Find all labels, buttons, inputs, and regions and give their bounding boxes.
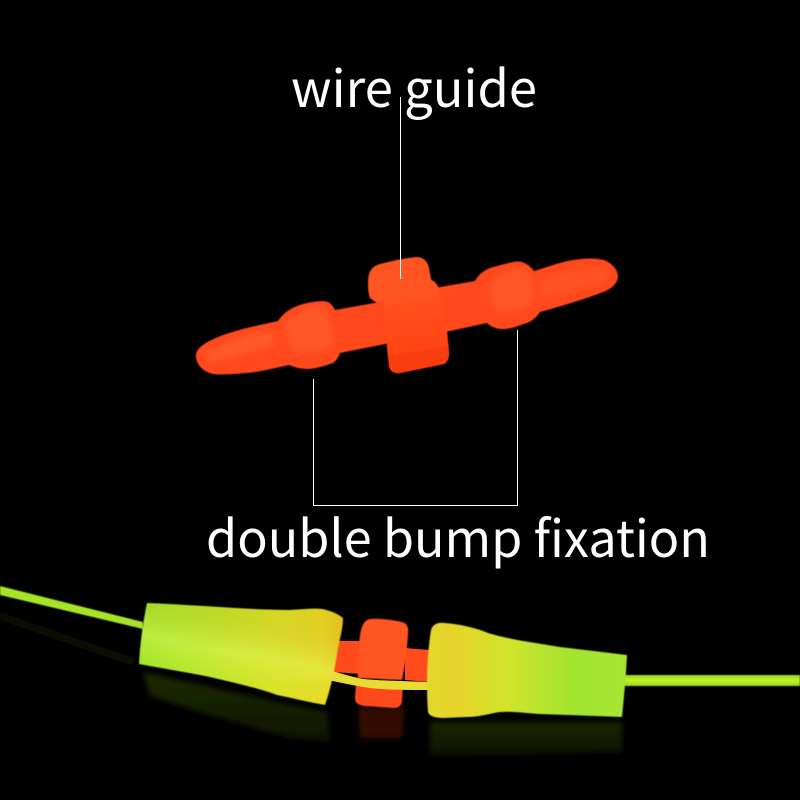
- orange wire guide part: [196, 257, 618, 374]
- left tube sheen: [139, 603, 343, 705]
- label: wire guide: wire guide: [291, 48, 537, 122]
- leader bracket: double bump fixation: [314, 330, 518, 506]
- lower orange ring: [355, 684, 403, 708]
- shaft with double bumps: [196, 258, 618, 374]
- reflections on the surface: [0, 612, 622, 756]
- assembled rig on fishing line: [0, 586, 800, 718]
- left green-yellow tube: [139, 603, 343, 705]
- label: double bump fixation: double bump fixation: [206, 498, 710, 572]
- front ring: [384, 280, 449, 373]
- right green-yellow tube: [427, 623, 627, 718]
- left tube body: [139, 603, 343, 705]
- fishing line right: [624, 675, 800, 686]
- back ring: [368, 257, 432, 304]
- leader line: wire guide: [400, 97, 402, 279]
- upper orange ring: [358, 619, 408, 680]
- bump highlights: [285, 306, 333, 353]
- front ring lower band: [389, 346, 449, 373]
- line through the rig: [328, 670, 428, 690]
- fishing line left: [0, 586, 143, 629]
- orange shaft: [333, 641, 362, 674]
